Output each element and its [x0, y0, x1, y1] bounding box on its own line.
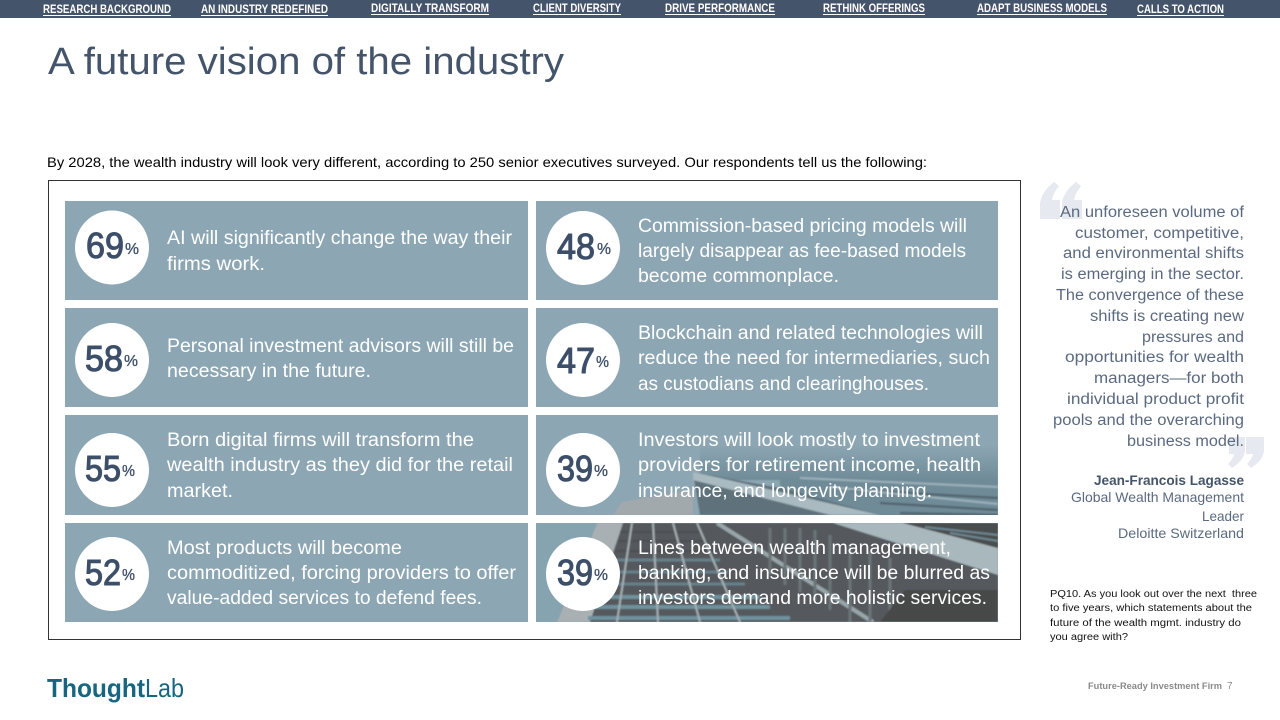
- pull quote: opportunities for wealth: [1065, 349, 1244, 366]
- finding: 39% blurred lines: banking, and insurance will be blurred as: [638, 563, 990, 584]
- finding: 58%: [65, 308, 528, 407]
- finding: 55%: [65, 415, 528, 515]
- finding: 69%: AI will significantly change the way their: [167, 228, 513, 249]
- quote attribution: Deloitte Switzerland: [1118, 525, 1244, 541]
- finding panels with building photo: 39% and 39%: [536, 415, 998, 622]
- facade columns: [617, 523, 740, 622]
- nav link: calls to action: CALLS TO ACTION: [1137, 4, 1224, 16]
- finding: 55%: wealth industry as they did for the retail: [166, 455, 513, 476]
- pull quote: shifts is creating new: [1090, 308, 1245, 325]
- pull quote: customer, competitive,: [1075, 225, 1244, 242]
- finding: 52%: [65, 523, 528, 622]
- finding: 39% retirement: 39: [557, 448, 593, 489]
- finding: 47%: [536, 308, 998, 407]
- pull quote: is emerging in the sector.: [1061, 266, 1244, 283]
- finding: 52%: Most products will become: [167, 538, 402, 559]
- finding: 48%: %: [597, 241, 611, 258]
- finding: 47%: %: [596, 354, 609, 371]
- nav link: drive performance: DRIVE PERFORMANCE: [665, 3, 775, 15]
- survey question note: you agree with?: [1050, 632, 1128, 643]
- nav link: research background: RESEARCH BACKGROUND: [43, 4, 171, 16]
- finding: 48%: largely disappear as fee-based models: [638, 241, 966, 262]
- finding: 47%: Blockchain and related technologies will: [638, 323, 983, 344]
- vertical window stripes: [770, 528, 890, 622]
- pull quote: pressures and: [1142, 329, 1244, 346]
- finding: 55%: market.: [167, 481, 233, 502]
- pull quote: An unforeseen volume of: [1060, 204, 1245, 221]
- finding: 47%: as custodians and clearinghouses.: [638, 374, 929, 395]
- nav link: digitally transform: DIGITALLY TRANSFORM: [371, 3, 489, 15]
- logo: ThoughtLab: Lab: [145, 673, 184, 703]
- finding: 55%: %: [122, 463, 135, 480]
- finding: 48%: 48: [557, 226, 595, 267]
- finding: 58%: %: [124, 353, 138, 370]
- facade floors: [608, 560, 745, 584]
- finding: 47%: reduce the need for intermediaries, such: [638, 348, 990, 369]
- finding: 39% retirement: providers for retirement income, health: [638, 455, 981, 476]
- nav link: rethink offerings: RETHINK OFFERINGS: [823, 3, 925, 15]
- finding: 55%: 55: [85, 448, 121, 489]
- finding: 52%: 52: [85, 552, 121, 593]
- survey question note: to five years, which statements about the: [1050, 603, 1252, 614]
- finding: 39% retirement: insurance, and longevity planning.: [638, 481, 932, 502]
- light beam: [833, 523, 998, 575]
- survey question note: [1050, 589, 1257, 643]
- finding: 39% blurred lines: 39: [557, 552, 593, 593]
- navigation bar: [0, 0, 1280, 18]
- survey question note: future of the wealth mgmt. industry do: [1050, 618, 1241, 629]
- title: A future vision of the industry: [48, 41, 564, 83]
- finding: 39% retirement: Investors will look mostly to investment: [638, 430, 981, 451]
- finding: 52%: value-added services to defend fees.: [167, 588, 482, 609]
- nav link: adapt business models: ADAPT BUSINESS MODELS: [977, 3, 1107, 15]
- finding: 55%: Born digital firms will transform the: [167, 430, 474, 451]
- finding: 39% blurred lines: %: [594, 567, 608, 584]
- intro text: By 2028, the wealth industry will look very different, according to 250 senior executives surveyed. Our respondents tell us the following:: [47, 154, 927, 170]
- finding: 69%: [65, 201, 528, 300]
- panel: survey findings: [48, 180, 1020, 640]
- finding: 48%: become commonplace.: [638, 266, 839, 287]
- pull quote: pools and the overarching: [1053, 412, 1244, 429]
- quote attribution: Global Wealth Management: [1071, 489, 1244, 505]
- finding: 47%: 47: [557, 340, 595, 381]
- finding: 58%: 58: [85, 338, 123, 379]
- pull quote: individual product profit: [1067, 391, 1245, 408]
- icon: opening quote mark: [1040, 182, 1082, 219]
- finding: 39% blurred lines: investors demand more holistic services.: [638, 588, 987, 609]
- nav link: client diversity: CLIENT DIVERSITY: [533, 3, 621, 15]
- quote attribution: [1071, 472, 1244, 541]
- finding: 48%: [536, 201, 998, 300]
- icon: closing quote mark: [1228, 437, 1264, 468]
- finding: 69%: 69: [86, 225, 124, 266]
- pull quote: [1053, 204, 1245, 450]
- upper panel: haze and facade: [700, 455, 998, 480]
- pull quote: The convergence of these: [1056, 287, 1244, 304]
- finding: 39% blurred lines: Lines between wealth management,: [638, 538, 951, 559]
- finding: 39% retirement: %: [594, 463, 608, 480]
- nav link: an industry redefined: AN INDUSTRY REDEFINED: [201, 4, 328, 16]
- pull quote: and environmental shifts: [1063, 245, 1244, 262]
- quote attribution: Leader: [1202, 508, 1244, 524]
- finding: 58%: Personal investment advisors will still be: [167, 336, 514, 357]
- finding: 52%: commoditized, forcing providers to offer: [167, 563, 517, 584]
- lower panel: dark base: [590, 523, 998, 622]
- finding: 58%: necessary in the future.: [167, 361, 371, 382]
- logo: ThoughtLab: Thought: [47, 673, 145, 703]
- finding: 39% blurred lines: [546, 537, 990, 611]
- pull quote: managers—for both: [1094, 370, 1244, 387]
- footer: report name and page number: Future-Ready Investment Firm: [1088, 681, 1222, 692]
- finding: 52%: %: [122, 567, 135, 584]
- quote attribution: Jean-Francois Lagasse: [1094, 472, 1244, 488]
- pull quote: business model.: [1127, 433, 1244, 450]
- footer: report name and page number: 7: [1227, 681, 1233, 692]
- finding: 48%: Commission-based pricing models will: [638, 216, 967, 237]
- survey question note: PQ10. As you look out over the next three: [1050, 589, 1257, 600]
- image: skyscraper photo: [558, 455, 998, 622]
- finding: 69%: firms work.: [167, 254, 265, 275]
- finding: 39% retirement: [546, 430, 981, 507]
- finding: 69%: %: [125, 241, 139, 258]
